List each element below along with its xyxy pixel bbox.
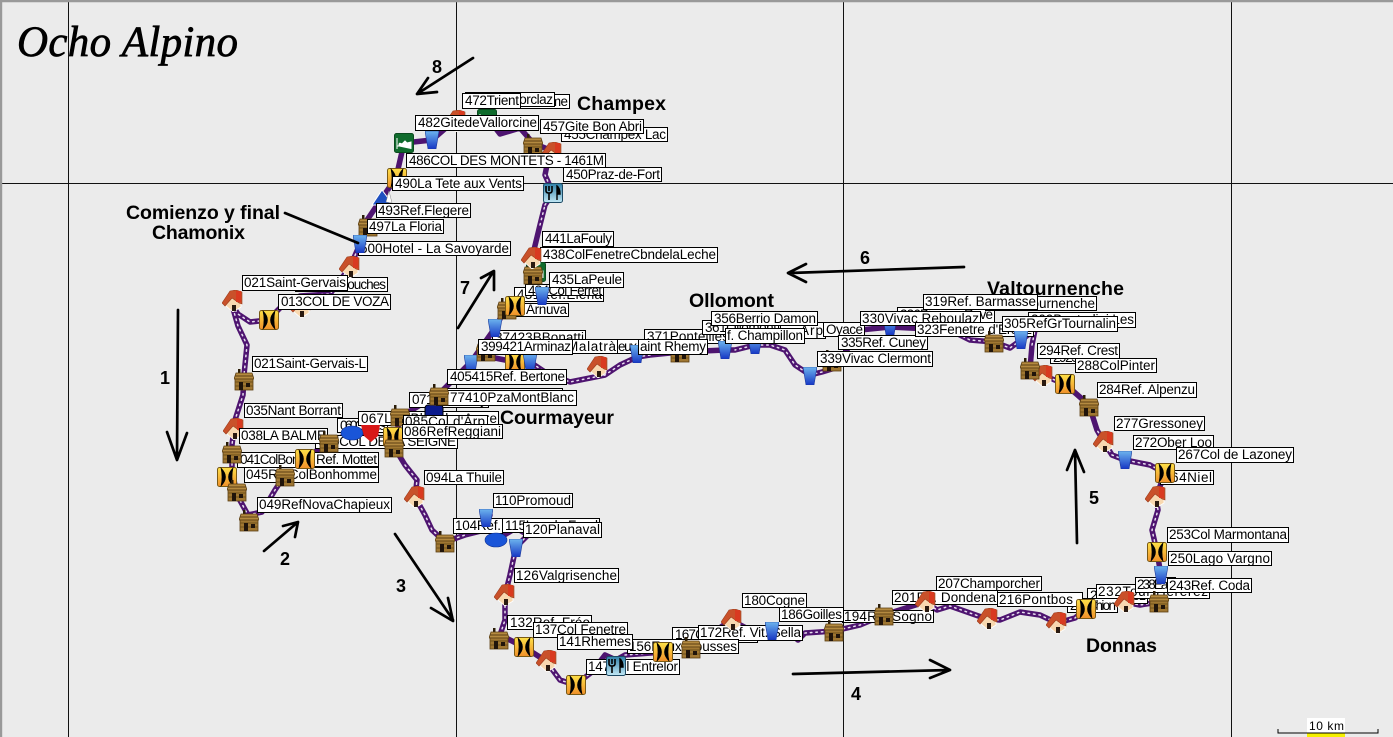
label: 021Saint-Gervais: 021Saint-Gervais [244, 275, 346, 290]
label: Saussure: 292Saussure [1053, 350, 1118, 365]
icon: col Fenetre [514, 638, 534, 656]
label: Les Houches: 007Les Houches [297, 277, 386, 292]
label: 486COL DES MONTETS: 486COL DES MONTETS - 1461M [409, 153, 604, 168]
arrow 3 [395, 534, 453, 621]
icon: cup Vallorcine [425, 131, 439, 149]
label: Rave: 326Bivacco Rave [900, 307, 993, 322]
label: 180Cogne: 180Cogne [744, 593, 805, 608]
title: Ocho Alpino [17, 19, 238, 66]
label: 085Col d'Arp: 085Col d'Arp [405, 414, 485, 429]
icon: col Perloz [1076, 600, 1096, 618]
icon: col Entrelor [566, 676, 586, 694]
number 7: 7 [460, 278, 470, 298]
place: Champex: Champex [577, 93, 666, 115]
icon: col Tete aux Vents [388, 168, 406, 188]
icon: hut Arminaz [476, 340, 496, 361]
label: 104Ref: 104Ref. [455, 518, 501, 533]
icon: hut Col Arp [390, 405, 410, 426]
direction arrows [160, 57, 1099, 704]
label: 284Ref. Alpenzu: 284Ref. Alpenzu [1099, 382, 1195, 397]
icon: cup Tournalin [1014, 331, 1028, 349]
route track [232, 117, 1165, 685]
label: 493Ref.Flegere: 493Ref.Flegere [378, 203, 469, 218]
label: 147 Entrelor: 147Col Entrelor [588, 659, 678, 674]
label: Bosses: eux [618, 339, 637, 354]
icon: hut La Floria [358, 215, 378, 236]
label: 22x: 228Perloz [1090, 588, 1146, 603]
icon: house La Fouly [521, 247, 541, 269]
icon: house Gressoney [1093, 431, 1113, 453]
icons under labels [222, 110, 897, 463]
label: 120Planaval: 120Planaval [525, 522, 600, 537]
icon: hut Goilles [824, 620, 844, 641]
icon: hut Saint-Gervais-L [234, 369, 254, 390]
label: RefGrTournalin: 305RefGrTournalin [1004, 316, 1116, 331]
icon: hut Sogno [874, 604, 894, 625]
icon: hut Coda [1149, 591, 1169, 612]
icon: hut Seigne [384, 436, 404, 457]
number 3: 3 [396, 576, 406, 596]
icon: cup Bonatti [488, 319, 502, 337]
label: 339Vivac Clermont: 339Vivac Clermont [820, 351, 931, 366]
label: 500Hotel - La Savoyarde: 500Hotel - La Savoyarde [360, 241, 509, 256]
number 8: 8 [432, 57, 442, 77]
label: 441LaFouly: 441LaFouly [545, 231, 612, 246]
label: 141Rhemes: 141Rhemes [559, 634, 631, 649]
icon: col Marmontana [1148, 542, 1166, 562]
label: 167: 167Col Lauson [675, 627, 756, 642]
icon: cup Bertone [523, 353, 537, 371]
icon: house Champorcher [977, 608, 997, 630]
icon: house Champex [541, 142, 561, 164]
icon: col Arnuva [506, 296, 524, 316]
icon: house Rhemes [536, 650, 556, 672]
icon: hut Ereo [489, 628, 509, 649]
icon: house Trient [445, 110, 465, 132]
icon: fork Entrelor [606, 656, 626, 676]
label: Oyace: Oyace [826, 322, 863, 337]
icon: house Cogne [721, 609, 741, 631]
label: 021Saint-Gervais-L: 021Saint-Gervais-L [254, 356, 366, 371]
label: 319Ref. Barmasse: 319Ref. Barmasse [925, 294, 1036, 309]
label: PzaMontBlanc underlay [438, 388, 562, 402]
label: 049RefNovaChapieux: 049RefNovaChapieux [259, 497, 390, 512]
label: 264Niel: 264Niel [1163, 470, 1212, 485]
icon: cup Vit. Sella [765, 622, 779, 640]
arrow: start Chamonix [285, 213, 358, 243]
label: Col Malatra: Malatrà [567, 339, 616, 354]
icon: house La Balme [223, 418, 243, 440]
label: 094La Thuile: 094La Thuile [426, 470, 502, 485]
label: 243Ref. Coda: 243Ref. Coda [1169, 578, 1250, 593]
label: 267Col de Lazoney: 267Col de Lazoney [1178, 447, 1292, 462]
icon: blue ellipse Seigne [341, 426, 363, 440]
label: 067: 067Lex Blanche Arvre [361, 411, 497, 426]
icon: hut Nova [227, 480, 247, 501]
label: 207Champorcher: 207Champorcher [938, 576, 1040, 591]
label: Champex Lac: 455Champex Lac [564, 127, 666, 142]
label: 110Promoud: 110Promoud [495, 493, 571, 508]
icon: cup Planaval [509, 539, 523, 557]
icon: bed Peule [526, 262, 546, 282]
label: Col Seigne: 075COL DE LA SEIGNE [318, 434, 456, 449]
icon: house Malatra [587, 356, 607, 378]
icon: house Tour [1114, 591, 1134, 613]
icon: hut Bonhomme [275, 465, 295, 486]
number 5: 5 [1089, 488, 1099, 508]
label: Col Arp: Arp [800, 323, 823, 338]
label: Saint Rhemy: aint Rhemy [640, 339, 706, 354]
place: Donnas: Donnas [1086, 635, 1157, 657]
icon: hut Mottet [319, 431, 339, 452]
icon: hut Peule [523, 263, 543, 284]
label: 038LA BALME: 038LA BALME [241, 428, 326, 443]
icon: fork Praz-de-Fort [544, 184, 562, 202]
label: 194 Sogno: 194Rif. Sogno [844, 609, 932, 624]
label: 035Nant Borrant: 035Nant Borrant [246, 403, 341, 418]
icon: col Bonhomme [218, 468, 236, 486]
icon: cup Clermont [803, 367, 817, 385]
label: 472Trient: 472Trient [465, 93, 519, 108]
icon: house Saint-Gervais [222, 290, 242, 312]
place: Courmayeur: Courmayeur [500, 407, 614, 429]
arrow 5 [1067, 450, 1084, 543]
icon: hut Clermont [822, 350, 842, 371]
place: Comienzo y final: Comienzo y final [126, 202, 280, 224]
icon: hut Chapieux [239, 510, 259, 531]
icon: hut PzaMontBlanc [429, 384, 449, 405]
label: Ref. Ereo: 132Ref. Fréo [510, 615, 590, 630]
label: 224: 224Chion [1070, 598, 1116, 613]
icon: col Voza [260, 310, 278, 330]
label: 490La Tete aux Vents: 490La Tete aux Vents [395, 176, 522, 191]
label: 115: 115Lac de Fond [505, 518, 598, 533]
place: Valtournenche: Valtournenche [987, 278, 1124, 300]
icon: dark flag [425, 405, 443, 422]
label: 06x: 060Glaciers [340, 418, 386, 433]
label: 137Col Fenetre: 137Col Fenetre [535, 622, 626, 637]
icon: house Valgrisenche [494, 584, 514, 606]
arrow 4 [793, 660, 950, 678]
icon: cup Lago Vargno [1154, 566, 1168, 584]
number 4: 4 [851, 684, 861, 704]
label: 438ColFenetre: 438ColFenetreCbndelaLeche [543, 247, 716, 262]
icon: cup Ober Loo [1118, 451, 1132, 469]
label: 361Ollomont: 361Ollomont [705, 320, 777, 335]
label: 253Col Marmontana: 253Col Marmontana [1169, 527, 1287, 542]
label: 356Berrio Damon: 356Berrio Damon [714, 311, 816, 326]
label: 450Praz-de-Fort: 450Praz-de-Fort [566, 167, 660, 182]
label: Col Arp [780, 322, 826, 338]
label: 399421Arminaz: 399421Arminaz [481, 339, 571, 354]
icon: hut Ref 104 [435, 531, 455, 552]
place names [126, 93, 1157, 657]
label: Col de Balme: 475Col de Balme [473, 94, 568, 109]
label: 216Pontbos: 216Pontbos [999, 592, 1073, 607]
icon: house Saussure [1032, 365, 1052, 387]
label: Arnuva: Arnuva [526, 302, 567, 317]
icon: blue ellipse 115 [485, 533, 507, 547]
icon: green bed Trient [478, 110, 496, 128]
label: 041: 041ColBonhomme [240, 452, 340, 467]
arrow 7 [458, 271, 494, 328]
icon: col Pinter [1056, 374, 1074, 394]
icon: cup Col Ferret [535, 287, 549, 305]
label: 497La Floria: 497La Floria [369, 219, 442, 234]
icon: cup Arminaz [464, 355, 478, 373]
label: 77410PzaMontBlanc: 77410PzaMontBlanc [450, 390, 574, 405]
label: 071: 071Lavachey [412, 392, 487, 407]
label: 457Gite Bon Abri: 457Gite Bon Abri [543, 119, 642, 134]
label: Valtournenche: 315Valtournenche [987, 296, 1095, 311]
label: 232Tour Hererez: 232Tour Hererez [1098, 584, 1208, 599]
label: 294Ref. Crest: 294Ref. Crest [1039, 343, 1118, 358]
label: 126Valgrisenche: 126Valgrisenche [516, 568, 617, 583]
label: Cervinia: 309Bontadini Les [1031, 312, 1134, 327]
number 6: 6 [860, 248, 870, 268]
icon: cup Promoud [479, 509, 493, 527]
icon: hut Rhemy [670, 341, 690, 362]
icon: cup Reboulaz [883, 317, 897, 335]
label: 330Vivac Reboulaz: 330Vivac Reboulaz [862, 311, 979, 326]
label: 013COL DE VOZA: 013COL DE VOZA [281, 294, 389, 309]
icon: house Pontbos [1046, 612, 1066, 634]
label: Ponteilles: 371Ponteilles [647, 329, 729, 344]
arrow 1 [167, 310, 187, 460]
icon: col Seigne [384, 428, 402, 446]
icon: hut Alpenzu [1079, 395, 1099, 416]
icon: cup Ponteilles [718, 341, 732, 359]
arrow 2 [264, 522, 298, 551]
label: 201 Dondena: 201Rif. Dondena [894, 590, 996, 605]
scale bar [1278, 718, 1378, 737]
label: 335Ref. Cuney: 335Ref. Cuney [841, 335, 926, 350]
label: 277Gressoney: 277Gressoney [1116, 416, 1203, 431]
label: 288ColPinter: 288ColPinter [1077, 358, 1156, 373]
icon: hut Arnuva [497, 298, 517, 319]
arrow 8 [417, 58, 473, 94]
icon: mountain Flegere [372, 190, 392, 205]
scale bar: 10 km [1309, 719, 1344, 733]
label: 482GitedeVallorcine: 482GitedeVallorcine [418, 115, 537, 130]
icon: cup Saint Rhemy [630, 345, 644, 363]
icon: col Mottet [296, 450, 314, 468]
icons above labels [218, 184, 1174, 694]
arrow 6 [788, 264, 964, 282]
place: Ollomont: Ollomont [689, 290, 774, 312]
upper waypoint labels [240, 93, 1294, 674]
label: 172Ref. Vit. Sella: 172Ref. Vit. Sella [700, 625, 801, 640]
label: 086RefReggiani: 086RefReggiani [404, 424, 501, 439]
icon: col Bertone [506, 352, 524, 372]
label: Col Ferret: 434Col Ferret [528, 283, 602, 298]
place: Chamonix: Chamonix [152, 222, 245, 244]
icon: hut Crest [1020, 358, 1040, 379]
icon: hut Ersaz [984, 331, 1004, 352]
icon: hut Eaux Rousses [681, 637, 701, 658]
number 1: 1 [160, 368, 170, 388]
label: 045 ColBonhomme: 045RefColBonhomme [246, 467, 377, 482]
icon: red marker [361, 425, 380, 442]
icon: cup Savoyarde [353, 235, 367, 253]
number 2: 2 [280, 549, 290, 569]
icon: bed Vallorcine [394, 134, 414, 152]
label: Ref. Mottet: Ref. Mottet [316, 452, 377, 467]
icon: cup Champillon [748, 336, 762, 354]
icon: col Eaux Rousses [654, 642, 672, 662]
label: 250Lago Vargno: 250Lago Vargno [1170, 551, 1270, 566]
label: Bonatti: 37423BBonatti [495, 330, 584, 345]
label: Ref. Champillon: f. Champillon [727, 328, 803, 343]
icon: house La Thuile [404, 486, 424, 508]
lower waypoint labels [238, 92, 1148, 642]
icon: house Voza [290, 296, 310, 318]
icon: col Lazoney [1156, 464, 1174, 482]
icon: house Houches [339, 256, 359, 278]
label: 272Ober Loo: 272Ober Loo [1135, 435, 1212, 450]
label: 435LaPeule: 435LaPeule [552, 272, 622, 287]
label: Forclaz: 474Col Forclaz [468, 92, 553, 107]
icon: house Dondena [915, 591, 935, 613]
icon: house Niel [1145, 486, 1165, 508]
label: 238: 238Eau [1137, 577, 1174, 592]
label: 323Fenetre d'Ersaz: 323Fenetre d'Ersaz [917, 322, 1032, 337]
label: 156Eaux Rousses: 156Eaux Rousses [629, 639, 737, 654]
icon: hut Bonhomme [222, 442, 242, 463]
label: Ref. Elena: 431Ref.Elena [517, 287, 602, 302]
label: 405415Ref. Bertone: 405415Ref. Bertone [450, 369, 565, 384]
label: 186Goilles: 186Goilles [781, 607, 842, 622]
icon: hut Bon Abri [523, 134, 543, 155]
